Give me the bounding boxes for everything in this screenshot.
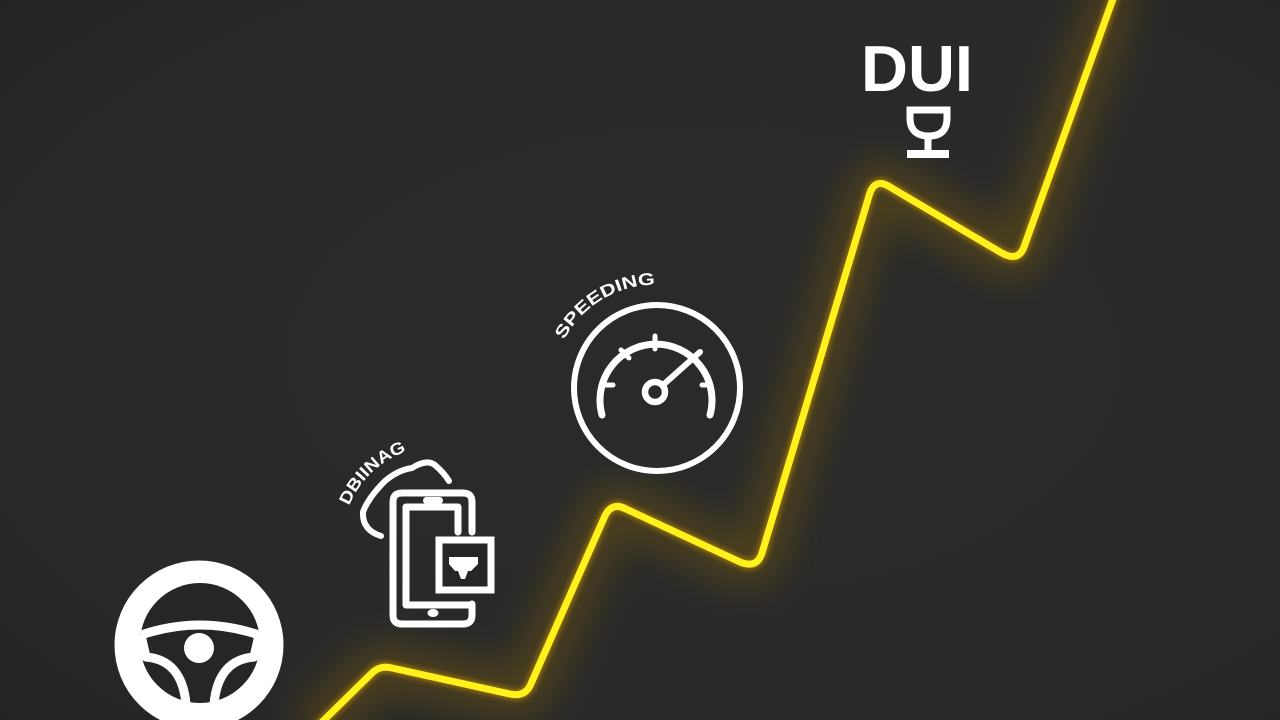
- icon: speedometer with curved label: [556, 273, 743, 474]
- neon rising line: [320, 0, 1114, 720]
- icon: phone with curved label: [339, 442, 494, 628]
- phone label: DBIINAG: [339, 442, 404, 505]
- icon: wine glass: [907, 110, 949, 158]
- heading: DUI: DUI: [861, 32, 973, 105]
- icon: steering wheel: [114, 560, 284, 720]
- speedometer label: SPEEDING: [556, 273, 654, 338]
